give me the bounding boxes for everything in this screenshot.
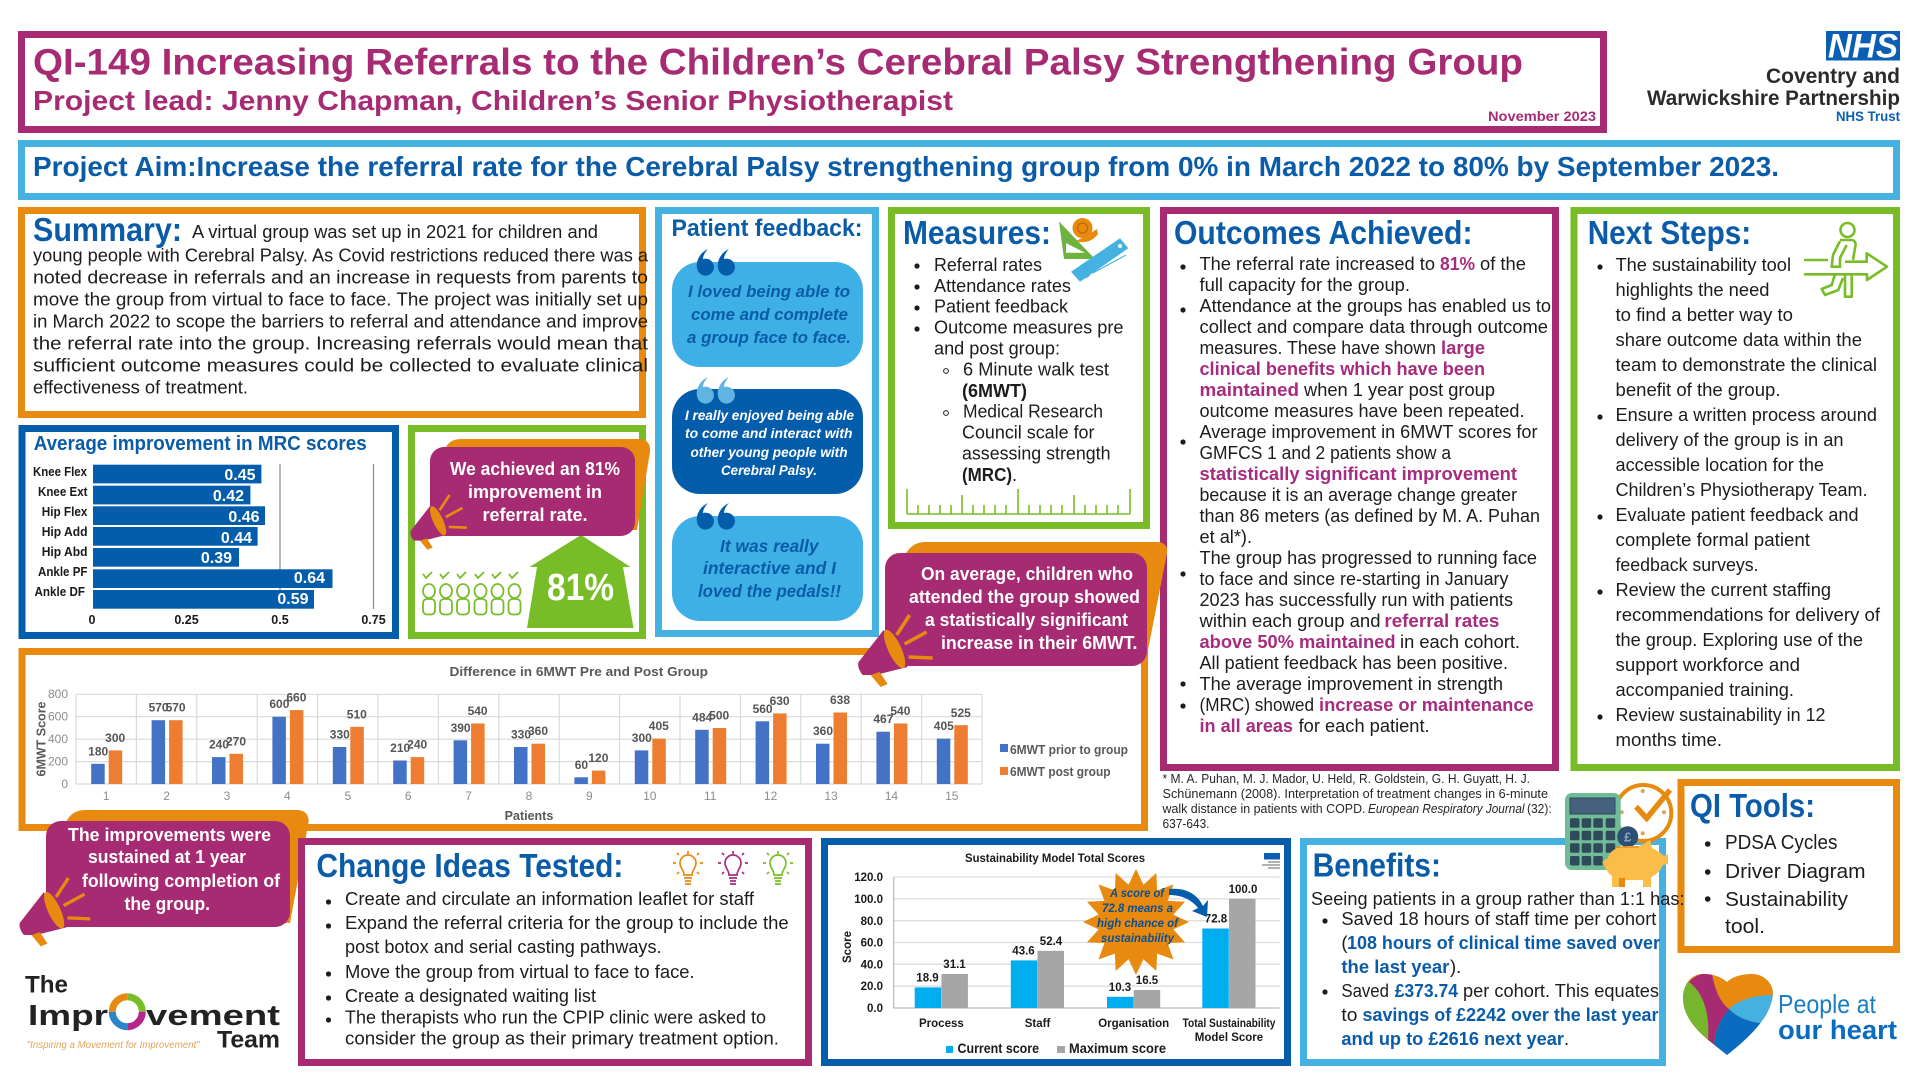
next steps list: share outcome data within the xyxy=(1616,329,1862,350)
grouped bar chart: 6MWT scores: 12 xyxy=(764,789,778,803)
measures list: Referral rates xyxy=(934,254,1042,275)
change ideas heading: Change Ideas Tested: xyxy=(316,847,623,884)
horizontal bar chart: 0.75 xyxy=(361,613,386,627)
outcomes list: referral rates xyxy=(1384,610,1499,631)
benefits text: and up to £2616 next year xyxy=(1341,1028,1564,1049)
benefits heading: Benefits: xyxy=(1313,846,1441,884)
benefits text: 108 hours of clinical time saved over xyxy=(1347,932,1660,953)
callout: statistically significant 6MWT increase: attended the group showed xyxy=(909,587,1140,607)
measures list: Medical Research xyxy=(963,400,1103,422)
outcomes list: than 86 meters (as defined by M. A. Puhan xyxy=(1200,505,1540,526)
QI tools list xyxy=(1705,831,1866,938)
bar chart: sustainability scores: 16.5 xyxy=(1136,975,1159,987)
bar chart: sustainability scores: 18.9 xyxy=(916,972,939,984)
outcomes list: Attendance at the groups has enabled us to xyxy=(1200,295,1551,316)
callout: statistically significant 6MWT increase xyxy=(858,542,1167,687)
grouped bar chart: 6MWT scores: 300 xyxy=(632,731,652,745)
callout: improvements sustained at 1 year xyxy=(19,810,309,946)
outcomes list: clinical benefits which have been xyxy=(1200,358,1485,379)
grouped bar chart: 6MWT scores: 0 xyxy=(61,777,68,791)
next steps list: months time. xyxy=(1616,729,1722,750)
footnote xyxy=(1162,771,1552,831)
quote bubble 3: It was really xyxy=(720,536,820,556)
callout: improvements sustained at 1 year: The improvements were xyxy=(68,825,271,845)
benefits text: Saved 18 hours of staff time per cohort xyxy=(1341,908,1656,929)
icon: calculator clock and piggy bank: £ xyxy=(1624,830,1632,844)
next steps list xyxy=(1597,254,1881,750)
measures list: and post group: xyxy=(934,338,1060,358)
next steps list: benefit of the group. xyxy=(1616,379,1780,400)
callout: statistically significant 6MWT increase: On average, children who xyxy=(921,564,1133,584)
icon: set square tape and ruler xyxy=(1059,218,1128,282)
chart title: Sustainability Model Total Scores xyxy=(965,853,1145,865)
measures list: Council scale for xyxy=(962,422,1094,442)
callout: star with sustainability note: 72.8 means a xyxy=(1102,903,1174,915)
outcomes list: All patient feedback has been positive. xyxy=(1200,652,1508,673)
grouped bar chart: 6MWT scores: 7 xyxy=(465,789,472,803)
logo: NHS Coventry and Warwickshire Partnership: NHS Trust xyxy=(1836,108,1900,124)
summary text: young people with Cerebral Palsy. As Covid restrictions reduced there was a xyxy=(33,244,649,266)
chart title: Difference in 6MWT Pre and Post Group xyxy=(450,665,708,679)
next steps list: Review the current staffing xyxy=(1616,579,1831,600)
grouped bar chart: 6MWT scores: 510 xyxy=(347,708,367,722)
summary text: effectiveness of treatment. xyxy=(33,376,248,398)
panel: summary xyxy=(22,210,649,414)
callout: 81 percent improvement: referral rate. xyxy=(482,505,588,525)
logo: The Improvement Team: The xyxy=(25,972,68,999)
quote bubble 1: come and complete xyxy=(691,306,848,324)
horizontal bar chart: 0.25 xyxy=(174,613,199,627)
icon: three light bulbs xyxy=(673,851,793,884)
grouped bar chart: 6MWT scores: 210 xyxy=(390,741,411,755)
arrow: 81 percent up arrow xyxy=(527,535,634,628)
mini NHS logo xyxy=(1262,853,1280,868)
change ideas list: Create and circulate an information leaflet for staff xyxy=(345,888,755,909)
outcomes list: statistically significant improvement xyxy=(1200,463,1517,484)
footnote: walk distance in patients with COPD. xyxy=(1162,801,1366,816)
grouped bar chart: 6MWT scores: 13 xyxy=(824,789,838,803)
grouped bar chart: 6MWT scores: 200 xyxy=(48,754,68,768)
grouped bar chart: 6MWT scores: Patients xyxy=(505,809,553,823)
next steps list: recommendations for delivery of xyxy=(1616,604,1881,625)
bar chart: sustainability scores: 120.0 xyxy=(854,872,883,884)
chart legend: Maximum score xyxy=(1069,1041,1166,1056)
grouped bar chart: 6MWT scores: 15 xyxy=(945,789,959,803)
grouped bar chart: 6MWT scores: 240 xyxy=(407,738,428,752)
grouped bar chart: 6MWT scores: 330 xyxy=(330,728,350,742)
panel: 6MWT chart xyxy=(22,652,1144,828)
grouped bar chart: 6MWT scores: 330 xyxy=(511,728,531,742)
grouped bar chart: 6MWT scores: 4 xyxy=(284,789,291,803)
outcomes list: measures. These have shown xyxy=(1200,337,1436,358)
next steps list: team to demonstrate the clinical xyxy=(1616,354,1877,375)
grouped bar chart: 6MWT scores: 9 xyxy=(586,789,593,803)
outcomes list: Average improvement in 6MWT scores for xyxy=(1200,421,1538,442)
logo: The Improvement Team: Impr xyxy=(28,1000,108,1032)
grouped bar chart: 6MWT scores: 6MWT Score xyxy=(34,701,48,777)
logo: NHS Coventry and Warwickshire Partnership: Warwickshire Partnership xyxy=(1647,87,1900,110)
horizontal bar chart: 0 xyxy=(89,613,96,627)
callout: improvements sustained at 1 year: the group. xyxy=(124,894,210,914)
chart heading: Average improvement in MRC scores xyxy=(34,433,367,455)
grouped bar chart: 6MWT scores: 300 xyxy=(105,731,126,745)
bar chart: sustainability scores: 60.0 xyxy=(861,938,883,950)
horizontal bar chart: 0.46 xyxy=(228,509,260,526)
panel: project aim xyxy=(22,144,1896,196)
next steps list: accompanied training. xyxy=(1616,679,1794,700)
grouped bar chart: 6MWT scores: 120 xyxy=(588,751,609,765)
bar chart: sustainability scores: Process xyxy=(919,1018,964,1030)
logo: The Improvement Team: Team xyxy=(217,1027,280,1054)
outcomes heading: Outcomes Achieved: xyxy=(1174,214,1472,251)
grouped bar chart: 6MWT scores: 570 xyxy=(166,700,186,714)
horizontal bar chart: 0.59 xyxy=(277,591,309,608)
aim text: Project Aim:Increase the referral rate for the Cerebral Palsy strengthening group from 0% in March 2022 to 80% by September 2023. xyxy=(33,151,1779,182)
benefits text: per cohort. This equates xyxy=(1463,980,1659,1001)
benefits text: savings of £2242 over the last year xyxy=(1362,1004,1658,1025)
benefits text: £373.74 xyxy=(1395,980,1459,1001)
outcomes list: of the xyxy=(1480,253,1526,274)
panel: benefits xyxy=(1304,785,1684,1062)
chart legend: 6MWT post group xyxy=(1010,765,1111,779)
horizontal bar chart xyxy=(33,464,386,627)
horizontal bar chart: Ankle DF xyxy=(34,585,85,599)
chart legend: Current score xyxy=(958,1041,1039,1056)
logo: The Improvement Team: "Inspiring a Movement for Improvement" xyxy=(27,1039,201,1051)
change ideas list: Move the group from virtual to face to face. xyxy=(345,961,695,982)
footnote: 637-643. xyxy=(1162,816,1210,831)
logo: The Improvement Team: vement xyxy=(146,1000,280,1032)
measures list xyxy=(914,254,1124,485)
change ideas list: Expand the referral criteria for the group to include the xyxy=(345,912,789,933)
quote bubble 2: Cerebral Palsy. xyxy=(721,463,817,478)
logo: People at our heart: People at xyxy=(1778,989,1877,1019)
grouped bar chart: 6MWT scores: 405 xyxy=(649,719,669,733)
horizontal bar chart: 0.45 xyxy=(224,467,256,484)
icon: person walking through arrow xyxy=(1804,223,1887,297)
bar chart: sustainability scores: Score xyxy=(842,931,854,963)
arrow: 81 percent up arrow: 81% xyxy=(547,567,614,609)
horizontal bar chart: Hip Abd xyxy=(42,545,88,559)
grouped bar chart: 6MWT scores: 8 xyxy=(526,789,533,803)
bar chart: sustainability scores: Total Sustainability xyxy=(1182,1018,1276,1030)
benefits text: . xyxy=(1564,1028,1569,1049)
next steps list: Review sustainability in 12 xyxy=(1616,704,1826,725)
benefits text: Seeing patients in a group rather than 1:1 has: xyxy=(1311,888,1684,909)
outcomes list xyxy=(1180,253,1551,736)
benefits text: to xyxy=(1341,1004,1357,1025)
summary text: sufficient outcome measures could be collected to evaluate clinical xyxy=(33,354,648,376)
outcomes list: large xyxy=(1441,337,1485,358)
benefits text: ( xyxy=(1341,932,1348,953)
benefits text: ). xyxy=(1450,956,1461,977)
horizontal bar chart: Knee Ext xyxy=(38,485,88,499)
summary text: A virtual group was set up in 2021 for children and xyxy=(192,221,598,242)
outcomes list: for each patient. xyxy=(1299,715,1430,736)
horizontal bar chart: Hip Add xyxy=(42,525,88,539)
bar chart: sustainability scores: 72.8 xyxy=(1205,914,1228,926)
horizontal bar chart: 0.5 xyxy=(271,613,289,627)
summary heading: Summary: xyxy=(33,211,182,248)
measures list: Outcome measures pre xyxy=(934,316,1124,338)
grouped bar chart: 6MWT scores: 6 xyxy=(405,789,412,803)
next steps list: support workforce and xyxy=(1616,654,1800,675)
panel: average improvement in MRC scores xyxy=(22,428,396,636)
panel: 81 percent achievement xyxy=(412,428,642,636)
arrow: star to total score bar xyxy=(1169,889,1208,917)
next steps list: The sustainability tool xyxy=(1616,254,1791,275)
QI tools list: PDSA Cycles xyxy=(1725,831,1838,854)
quote bubble 3: loved the pedals!! xyxy=(698,581,841,601)
grouped bar chart: 6MWT scores: 570 xyxy=(149,700,169,714)
bar chart: sustainability scores: Organisation xyxy=(1098,1018,1169,1030)
measures list: (6MWT) xyxy=(962,380,1027,401)
logo: People at our heart: our heart xyxy=(1778,1015,1897,1045)
bar chart: sustainability scores: 31.1 xyxy=(943,959,966,971)
logo: NHS Coventry and Warwickshire Partnership: Coventry and xyxy=(1766,65,1900,88)
callout: improvements sustained at 1 year: sustained at 1 year xyxy=(88,847,246,867)
grouped bar chart: 6MWT scores: 1 xyxy=(103,789,110,803)
grouped bar chart: 6MWT scores: 5 xyxy=(344,789,351,803)
footnote: (32): xyxy=(1527,801,1552,816)
outcomes list: outcome measures have been repeated. xyxy=(1200,400,1524,421)
QI tools list: Sustainability xyxy=(1725,888,1849,911)
next steps heading: Next Steps: xyxy=(1588,214,1751,251)
callout: 81 percent improvement xyxy=(410,439,650,550)
outcomes list: above 50% maintained xyxy=(1200,631,1396,652)
grouped bar chart: 6MWT scores: 638 xyxy=(830,693,850,707)
benefits text xyxy=(1311,888,1684,1049)
footnote: Schünemann (2008). Interpretation of treatment changes in 6-minute xyxy=(1162,786,1548,801)
logo: The Improvement Team xyxy=(25,972,280,1054)
callout: 81 percent improvement: We achieved an 81% xyxy=(450,459,620,479)
bar chart: sustainability scores: Staff xyxy=(1025,1018,1050,1030)
benefits text: the last year xyxy=(1341,956,1449,977)
change ideas list: consider the group as their primary treatment option. xyxy=(345,1028,779,1048)
footnote: * M. A. Puhan, M. J. Mador, U. Held, R. Goldstein, G. H. Guyatt, H. J. xyxy=(1162,771,1530,786)
measures list: Patient feedback xyxy=(934,296,1069,316)
grouped bar chart: 6MWT scores: 240 xyxy=(209,738,229,752)
next steps list: accessible location for the xyxy=(1616,454,1824,475)
change ideas list: Create a designated waiting list xyxy=(345,985,596,1006)
grouped bar chart: 6MWT scores: 560 xyxy=(753,702,773,716)
bar chart: sustainability scores: 52.4 xyxy=(1040,936,1063,948)
measures list: . xyxy=(1012,464,1017,485)
grouped bar chart: 6MWT scores: 60 xyxy=(575,758,588,772)
outcomes list: 2023 has successfully run with patients xyxy=(1200,589,1513,610)
outcomes list: because it is an average change greater xyxy=(1200,484,1517,505)
outcomes list: The group has progressed to running face xyxy=(1200,547,1537,568)
grouped bar chart: 6MWT scores: 540 xyxy=(468,704,488,718)
footnote: European Respiratory Journal xyxy=(1368,801,1525,816)
grouped bar chart: 6MWT scores: 270 xyxy=(226,734,246,748)
summary text xyxy=(33,221,649,398)
panel: change ideas tested xyxy=(302,842,808,1062)
outcomes list: collect and compare data through outcome xyxy=(1200,316,1548,337)
next steps list: highlights the need xyxy=(1616,279,1770,300)
logo: NHS Coventry and Warwickshire Partnership xyxy=(1647,28,1900,124)
grouped bar chart: 6MWT scores: 10 xyxy=(643,789,657,803)
callout: statistically significant 6MWT increase: increase in their 6MWT. xyxy=(941,633,1138,653)
next steps list: feedback surveys. xyxy=(1616,554,1758,575)
measures list: 6 Minute walk test xyxy=(963,358,1109,380)
grouped bar chart: 6MWT scores: 660 xyxy=(286,690,307,704)
grouped bar chart: 6MWT scores: 2 xyxy=(163,789,170,803)
grouped bar chart: 6MWT scores: 540 xyxy=(890,704,911,718)
outcomes list: full capacity for the group. xyxy=(1200,274,1410,295)
measures list: Attendance rates xyxy=(934,275,1071,296)
outcomes list: et al*). xyxy=(1200,526,1252,547)
outcomes list: The referral rate increased to xyxy=(1200,253,1435,274)
summary text: the referral rate into the group. Increasing referrals would mean that xyxy=(33,332,648,354)
horizontal bar chart: 0.44 xyxy=(221,530,252,547)
quote bubble 2: other young people with xyxy=(690,445,848,460)
outcomes list: The average improvement in strength xyxy=(1200,673,1503,694)
bar chart: sustainability scores: 80.0 xyxy=(861,916,883,928)
next steps list: Evaluate patient feedback and xyxy=(1616,504,1858,525)
next steps list: Children’s Physiotherapy Team. xyxy=(1616,479,1868,500)
horizontal bar chart: 0.39 xyxy=(201,550,232,567)
outcomes list: when 1 year post group xyxy=(1303,379,1495,400)
outcomes list: in all areas xyxy=(1200,715,1293,736)
summary text: move the group from virtual to face to face. The project was initially set up xyxy=(33,288,648,310)
outcomes list: GMFCS 1 and 2 patients show a xyxy=(1200,442,1452,463)
panel: outcomes achieved xyxy=(1164,210,1556,768)
bar chart: sustainability scores: 43.6 xyxy=(1012,946,1035,958)
QI tools list: Driver Diagram xyxy=(1725,860,1866,883)
panel: measures xyxy=(892,210,1146,526)
chart legend xyxy=(946,1041,1166,1056)
outcomes list: (MRC) showed xyxy=(1200,694,1314,715)
grouped bar chart: 6MWT scores: 3 xyxy=(224,789,231,803)
next steps list: delivery of the group is in an xyxy=(1616,429,1844,450)
icon: people with check marks xyxy=(423,572,520,614)
quote bubble 1: a group face to face. xyxy=(687,329,851,347)
QI tools list: tool. xyxy=(1725,915,1765,938)
callout: star with sustainability note: high chance of xyxy=(1097,918,1179,930)
bar chart: sustainability scores: 0.0 xyxy=(867,1003,883,1015)
title: QI-149 Increasing Referrals to the Children’s Cerebral Palsy Strengthening Group xyxy=(33,40,1523,82)
grouped bar chart: 6MWT scores: 390 xyxy=(451,721,471,735)
outcomes list: increase or maintenance xyxy=(1319,694,1534,715)
panel: next steps xyxy=(1574,210,1896,768)
quote bubble 1 xyxy=(672,249,863,367)
grouped bar chart: 6MWT scores: 11 xyxy=(704,789,717,803)
bar chart: sustainability scores xyxy=(842,872,1280,1044)
benefits text: Saved xyxy=(1341,980,1389,1001)
outcomes list: to face and since re-starting in January xyxy=(1200,568,1509,589)
bar chart: sustainability scores: 40.0 xyxy=(861,960,883,972)
grouped bar chart: 6MWT scores: 484 xyxy=(692,710,713,724)
outcomes list: within each group and xyxy=(1199,610,1380,631)
grouped bar chart: 6MWT scores: 360 xyxy=(813,724,833,738)
grouped bar chart: 6MWT scores: 600 xyxy=(269,697,290,711)
project lead: Project lead: Jenny Chapman, Children’s Senior Physiotherapist xyxy=(33,85,953,116)
bar chart: sustainability scores: 20.0 xyxy=(861,981,883,993)
grouped bar chart: 6MWT scores: 800 xyxy=(48,687,68,701)
callout: 81 percent improvement: improvement in xyxy=(468,482,602,502)
next steps list: the group. Exploring use of the xyxy=(1616,629,1863,650)
quote bubble 2: I really enjoyed being able xyxy=(685,408,854,423)
change ideas list xyxy=(326,888,789,1048)
QI tools heading: QI Tools: xyxy=(1690,787,1815,824)
summary text: noted decrease in referrals and an increase in requests from parents to xyxy=(33,266,648,288)
grouped bar chart: 6MWT scores: 467 xyxy=(873,712,894,726)
chart legend xyxy=(1000,743,1128,779)
horizontal bar chart: 0.42 xyxy=(213,488,244,505)
outcomes list: maintained xyxy=(1200,379,1299,400)
quote bubble 2: to come and interact with xyxy=(685,426,852,441)
next steps list: complete formal patient xyxy=(1616,529,1810,550)
panel: title banner xyxy=(22,34,1604,130)
grouped bar chart: 6MWT scores: 525 xyxy=(951,706,971,720)
grouped bar chart: 6MWT scores: 405 xyxy=(934,719,954,733)
measures list: assessing strength xyxy=(962,442,1110,464)
quote bubble 3 xyxy=(672,503,863,621)
logo: NHS Coventry and Warwickshire Partnership: NHS xyxy=(1828,28,1898,66)
panel: patient feedback xyxy=(658,210,876,634)
horizontal bar chart: 0.64 xyxy=(294,570,325,587)
quote bubble 1: I loved being able to xyxy=(688,283,850,301)
next steps list: to find a better way to xyxy=(1616,304,1793,325)
outcomes list: in each cohort. xyxy=(1400,631,1520,652)
callout: star with sustainability note: A score of xyxy=(1109,888,1165,900)
change ideas list: The therapists who run the CPIP clinic were asked to xyxy=(345,1006,766,1028)
callout: improvements sustained at 1 year: following completion of xyxy=(82,871,281,891)
quote bubble 2 xyxy=(672,377,863,494)
bar chart: sustainability scores: 100.0 xyxy=(1229,884,1257,896)
callout: statistically significant 6MWT increase: a statistically significant xyxy=(925,610,1128,630)
outcomes list: 81% xyxy=(1440,253,1475,274)
logo: People at our heart xyxy=(1683,974,1897,1055)
feedback heading: Patient feedback: xyxy=(672,215,862,242)
bar chart: sustainability scores: 100.0 xyxy=(854,894,883,906)
chart legend: 6MWT prior to group xyxy=(1010,743,1128,757)
horizontal bar chart: Knee Flex xyxy=(33,465,87,479)
grouped bar chart: 6MWT scores: 600 xyxy=(48,710,68,724)
quote bubble 3: interactive and I xyxy=(703,558,837,578)
grouped bar chart: 6MWT scores: 630 xyxy=(770,694,790,708)
date: November 2023 xyxy=(1488,108,1596,124)
summary text: in March 2022 to scope the barriers to referral and attendance and improve xyxy=(33,310,648,332)
grouped bar chart: 6MWT scores xyxy=(34,687,982,823)
change ideas list: post botox and serial casting pathways. xyxy=(345,936,662,957)
grouped bar chart: 6MWT scores: 14 xyxy=(885,789,898,803)
measures list: (MRC) xyxy=(962,464,1012,485)
next steps list: Ensure a written process around xyxy=(1616,404,1877,425)
grouped bar chart: 6MWT scores: 180 xyxy=(88,744,109,758)
horizontal bar chart: Hip Flex xyxy=(42,505,88,519)
icon: calculator clock and piggy bank xyxy=(1565,785,1671,887)
bar chart: sustainability scores: 10.3 xyxy=(1109,982,1131,994)
measures heading: Measures: xyxy=(903,214,1051,251)
horizontal bar chart: Ankle PF xyxy=(38,565,88,579)
grouped bar chart: 6MWT scores: 400 xyxy=(48,732,68,746)
grouped bar chart: 6MWT scores: 360 xyxy=(528,724,548,738)
callout: star with sustainability note: sustainability xyxy=(1101,933,1175,945)
panel: QI tools xyxy=(1681,782,1896,950)
bar chart: sustainability scores: Model Score xyxy=(1195,1032,1263,1044)
callout: star with sustainability note xyxy=(1083,869,1189,975)
grouped bar chart: 6MWT scores: 500 xyxy=(709,708,730,722)
icon: ruler scale xyxy=(907,489,1130,514)
panel: sustainability model chart xyxy=(824,842,1288,1062)
